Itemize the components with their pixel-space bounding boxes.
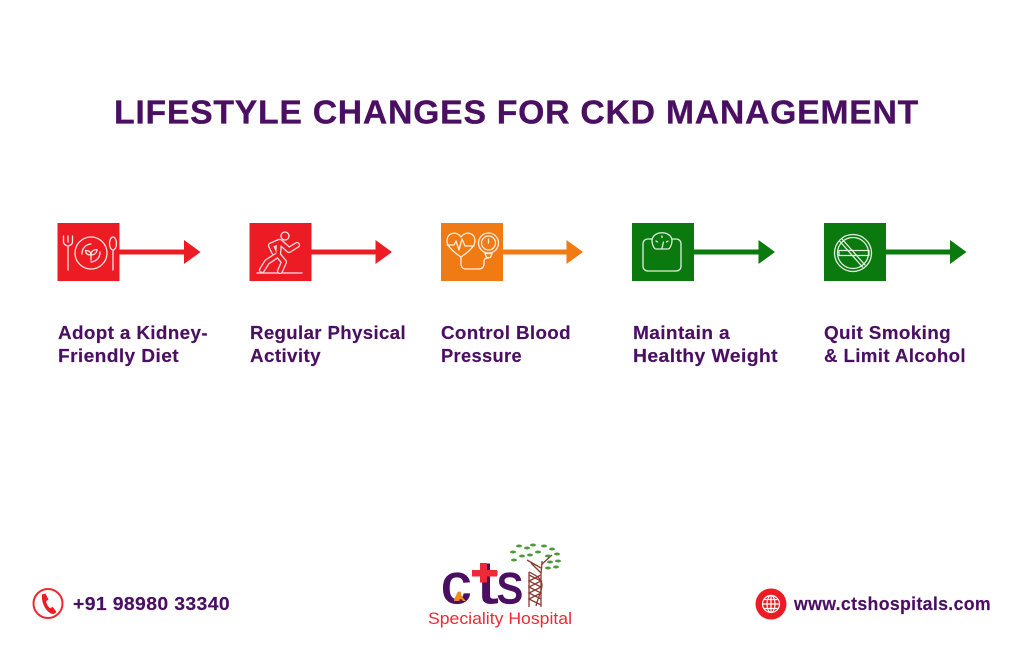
logo: CTS Speciality Hospital — [428, 544, 572, 628]
arrow — [120, 240, 200, 264]
step 5: quit smoking and limit alcohol — [824, 223, 966, 366]
logo letter c: c — [441, 552, 471, 615]
icon: heart and pressure gauge — [441, 223, 503, 281]
step 1: kidney-friendly diet — [58, 223, 208, 366]
contact: website — [756, 588, 991, 620]
arrow — [886, 240, 966, 264]
label: Control Blood — [441, 323, 571, 343]
label: Pressure — [441, 346, 522, 366]
phone number: +91 98980 33340 — [73, 594, 230, 614]
label: & Limit Alcohol — [824, 346, 966, 366]
step 4: healthy weight — [632, 223, 778, 366]
label: Regular Physical — [250, 323, 406, 343]
logo letter t: t — [477, 549, 498, 616]
arrow — [312, 240, 392, 264]
label: Quit Smoking — [824, 323, 951, 343]
label: Activity — [250, 346, 321, 366]
arrow — [694, 240, 775, 264]
label: Maintain a — [633, 323, 731, 343]
logo red cross — [472, 563, 497, 582]
logo tree — [510, 544, 561, 607]
label: Friendly Diet — [58, 346, 179, 366]
logo caption: Speciality Hospital — [428, 609, 572, 628]
website address: www.ctshospitals.com — [793, 594, 991, 614]
icon: weighing scale — [632, 223, 694, 281]
step 3: control blood pressure — [441, 223, 583, 366]
logo figure — [454, 592, 466, 601]
logo letter s: s — [497, 552, 523, 615]
label: Adopt a Kidney- — [58, 323, 208, 343]
arrow — [503, 240, 583, 264]
icon: runner — [250, 223, 312, 281]
icon: no smoking — [824, 223, 886, 281]
icon: globe — [756, 588, 786, 620]
contact: phone — [34, 589, 230, 618]
title: LIFESTYLE CHANGES FOR CKD MANAGEMENT — [114, 94, 919, 130]
label: Healthy Weight — [633, 346, 778, 366]
icon: phone — [34, 589, 62, 618]
icon: plate and cutlery — [58, 223, 120, 281]
step 2: regular physical activity — [250, 223, 406, 366]
